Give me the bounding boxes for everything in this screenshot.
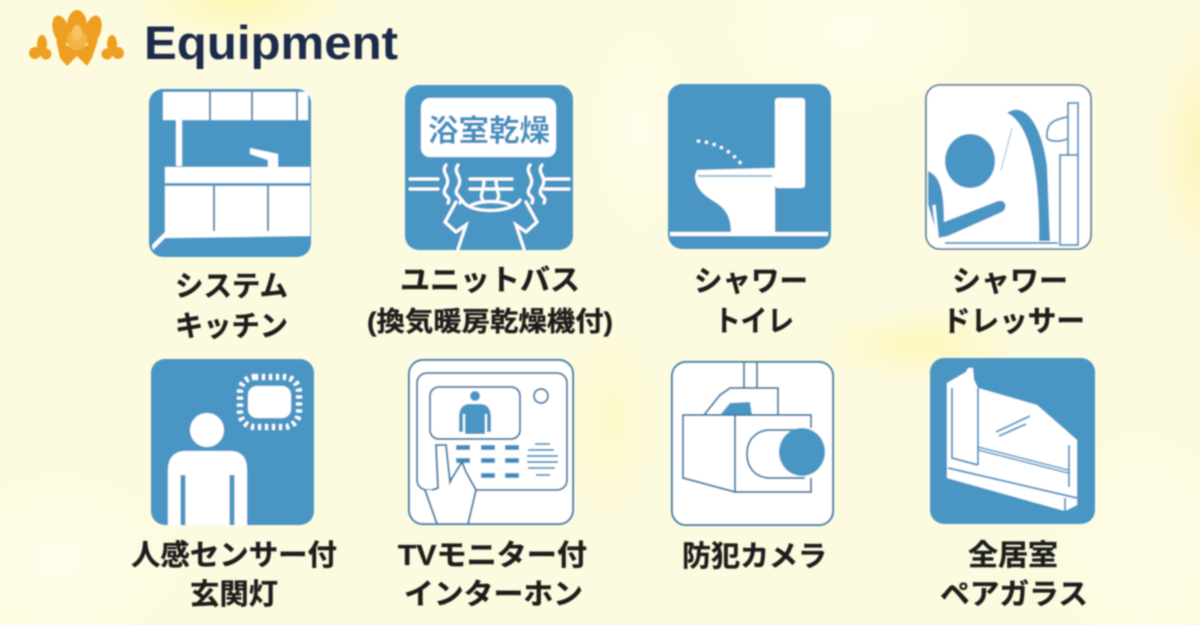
label: pair glass: ペアガラス — [940, 578, 1088, 611]
icon: intercom — [409, 360, 573, 524]
icon: toilet — [668, 84, 831, 249]
label: system kitchen: システム — [175, 271, 288, 303]
heading: Equipment: Equipment — [144, 16, 398, 69]
label: unit bath — [367, 265, 613, 337]
label: motion sensor entrance light — [131, 539, 337, 611]
label: pair glass — [940, 539, 1088, 611]
label: shower toilet: シャワー — [694, 266, 808, 298]
panel: motion sensor entrance light — [131, 359, 337, 611]
label: security camera: 防犯カメラ — [682, 540, 827, 573]
label: TV monitor intercom: インターホン — [404, 578, 583, 611]
label: shower dresser — [942, 266, 1085, 338]
panel: security camera — [672, 362, 833, 573]
panel: shower toilet — [668, 84, 831, 338]
panel: TV monitor intercom — [398, 360, 587, 611]
panel: system kitchen — [149, 89, 311, 343]
label: shower toilet: トイレ — [714, 306, 794, 338]
label: unit bath: (換気暖房乾燥機付) — [367, 307, 613, 337]
label: shower dresser: ドレッサー — [942, 306, 1085, 338]
label: system kitchen: キッチン — [175, 311, 288, 343]
label: motion sensor entrance light: 人感センサー付 — [131, 539, 337, 572]
panel: unit bath — [367, 85, 613, 337]
icon: kitchen — [149, 89, 311, 257]
label: TV monitor intercom: TVモニター付 — [398, 539, 587, 572]
icon: bathroom dryer — [405, 85, 573, 250]
label: motion sensor entrance light: 玄関灯 — [190, 578, 278, 611]
label: TV monitor intercom — [398, 539, 587, 611]
label: shower dresser: シャワー — [952, 266, 1068, 298]
panel: shower dresser — [926, 85, 1091, 338]
label: unit bath: ユニットバス — [400, 265, 580, 297]
icon: double glazed window — [930, 358, 1095, 524]
icon: person and light — [151, 359, 314, 525]
icon: bathroom dryer: 浴室乾燥 — [428, 115, 550, 148]
label: shower toilet — [694, 266, 808, 338]
label: pair glass: 全居室 — [968, 539, 1058, 572]
panel: pair glass — [930, 358, 1095, 611]
icon: camera — [672, 362, 833, 525]
label: system kitchen — [175, 271, 288, 343]
icon: shower dresser — [926, 85, 1091, 249]
section icon: orange lotus — [29, 10, 124, 66]
